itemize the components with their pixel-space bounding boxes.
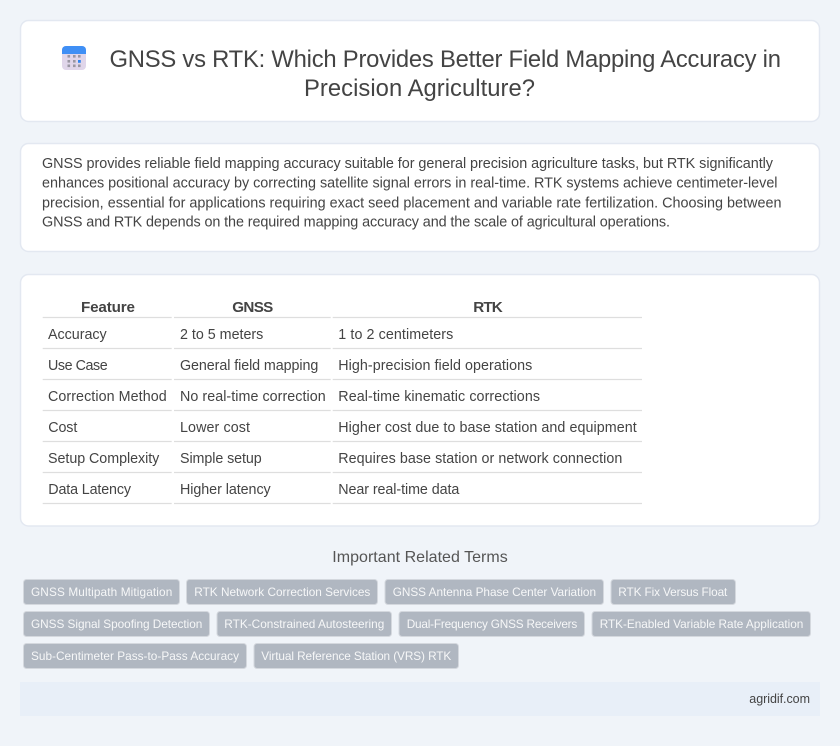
row: accuracy: 2 to 5 meters — [180, 327, 263, 343]
tag — [24, 644, 246, 668]
footer — [20, 682, 820, 716]
row: accuracy — [48, 327, 453, 343]
row: data latency — [48, 482, 459, 498]
heading: important related terms: Important Related Terms — [332, 549, 508, 566]
tag: GNSS Multipath Mitigation — [31, 585, 172, 599]
tag — [611, 580, 736, 604]
row: cost: Cost — [48, 420, 77, 436]
row: setup complexity: Requires base station or network connection — [338, 451, 622, 467]
row: use case: High-precision field operations — [338, 358, 532, 374]
tag — [385, 580, 604, 604]
table header: RTK — [473, 299, 503, 316]
tag: Virtual Reference Station (VRS) RTK — [261, 649, 451, 663]
title — [110, 46, 781, 102]
text block: summary: enhances positional accuracy by correcting satellite signal errors in real-time. RTK systems achieve centimeter-level — [42, 176, 778, 192]
row: cost: Lower cost — [180, 420, 250, 436]
table grid lines — [43, 318, 642, 504]
text block: summary: GNSS provides reliable field mapping accuracy suitable for general precision agriculture tasks, but RTK significantly — [42, 156, 774, 172]
text block: summary: precision, essential for applications requiring exact seed placement and variable rate fertilization. Choosing between — [42, 196, 782, 212]
icon: calendar — [62, 46, 86, 70]
row: accuracy: Accuracy — [48, 327, 108, 343]
row: use case — [48, 358, 532, 374]
row: setup complexity: Simple setup — [180, 451, 262, 467]
panel: comparison table — [20, 274, 820, 526]
row: data latency: Data Latency — [48, 482, 132, 498]
tag — [217, 612, 392, 636]
title: GNSS vs RTK: Which Provides Better Field Mapping Accuracy in — [110, 46, 781, 73]
row: cost: Higher cost due to base station and equipment — [338, 420, 637, 436]
footer: agridif.com — [749, 692, 810, 706]
tag: RTK-Enabled Variable Rate Application — [600, 617, 803, 631]
table header: GNSS — [232, 299, 273, 316]
tag: Dual-Frequency GNSS Receivers — [407, 617, 577, 631]
tag — [254, 644, 458, 668]
row: correction method: Real-time kinematic corrections — [338, 389, 540, 405]
tag: GNSS Signal Spoofing Detection — [31, 617, 202, 631]
row: use case: General field mapping — [180, 358, 318, 374]
panel: summary paragraph — [20, 144, 820, 252]
panel: related term tags — [24, 580, 810, 668]
tag — [399, 612, 584, 636]
table header — [81, 299, 503, 316]
tag — [24, 612, 210, 636]
text block: summary — [42, 156, 782, 230]
row: correction method: No real-time correction — [180, 389, 326, 405]
row: correction method — [48, 389, 540, 405]
tag — [24, 580, 180, 604]
tag: Sub-Centimeter Pass-to-Pass Accuracy — [31, 649, 239, 663]
tag — [186, 580, 378, 604]
tag: RTK Network Correction Services — [194, 585, 370, 599]
table header: Feature — [81, 299, 135, 316]
tag: GNSS Antenna Phase Center Variation — [393, 585, 596, 599]
row: setup complexity — [48, 451, 622, 467]
row: use case: Use Case — [48, 358, 108, 374]
row: correction method: Correction Method — [48, 389, 167, 405]
panel: title header — [20, 20, 820, 122]
tag — [592, 612, 810, 636]
title: Precision Agriculture? — [304, 75, 535, 102]
row: data latency: Near real-time data — [338, 482, 459, 498]
row: cost — [48, 420, 637, 436]
tag: RTK-Constrained Autosteering — [224, 617, 384, 631]
row: data latency: Higher latency — [180, 482, 272, 498]
row: accuracy: 1 to 2 centimeters — [338, 327, 453, 343]
row: setup complexity: Setup Complexity — [48, 451, 160, 467]
tag: RTK Fix Versus Float — [618, 585, 728, 599]
text block: summary: GNSS and RTK depends on the required mapping accuracy and the scale of agricultural operations. — [42, 214, 670, 230]
